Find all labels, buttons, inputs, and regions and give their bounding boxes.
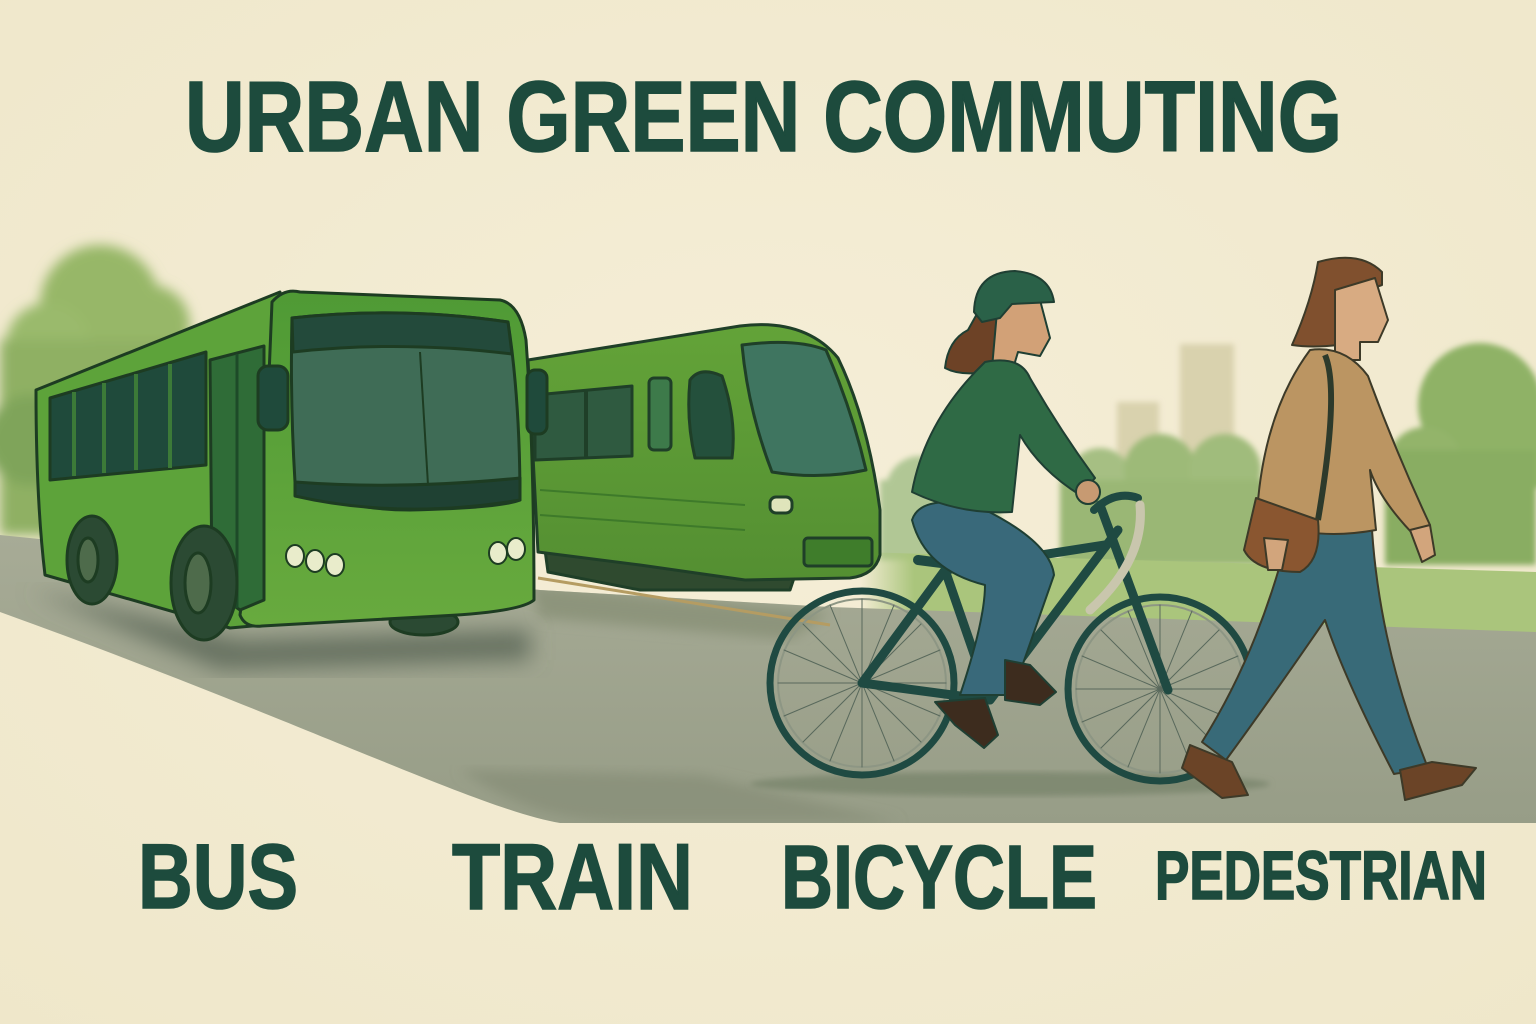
train undercarriage xyxy=(545,550,800,590)
train headlight xyxy=(770,497,792,513)
grass xyxy=(860,552,1536,640)
frame xyxy=(862,505,1168,700)
train panel lines xyxy=(540,490,745,530)
bus door xyxy=(210,346,264,610)
cyclist jacket xyxy=(912,360,1095,512)
bus headlights xyxy=(286,538,525,576)
bag strap xyxy=(1318,355,1331,520)
saddle xyxy=(918,560,965,566)
bus shadow xyxy=(30,590,530,670)
train windscreen xyxy=(742,342,866,476)
train side windows xyxy=(535,386,632,460)
train grille xyxy=(804,538,872,566)
trees right xyxy=(880,343,1536,565)
road shading xyxy=(460,585,900,822)
pedestrian shoes xyxy=(1182,745,1248,798)
pedestrian hair xyxy=(1292,258,1382,346)
bus body front xyxy=(240,291,534,626)
train rail xyxy=(538,578,830,625)
helmet xyxy=(974,271,1054,322)
cyclist hair xyxy=(945,312,1006,373)
label: bus: BUS xyxy=(138,826,298,928)
cyclist xyxy=(912,271,1100,748)
bicycle xyxy=(770,496,1252,781)
pedestrian jacket xyxy=(1256,349,1430,538)
pedestrian xyxy=(1182,258,1476,800)
train xyxy=(528,325,880,590)
bus xyxy=(36,291,547,640)
label: bicycle: BICYCLE xyxy=(781,828,1097,928)
bicycle shadow xyxy=(750,772,1270,796)
bag xyxy=(1244,498,1319,572)
cyclist hand xyxy=(1076,480,1100,504)
bus mirrors xyxy=(258,366,288,430)
cyclist shoes xyxy=(935,698,998,748)
bus body side xyxy=(36,292,300,628)
cyclist face xyxy=(992,300,1050,372)
train door xyxy=(649,378,671,450)
front wheel xyxy=(1068,597,1252,781)
rear wheel xyxy=(770,591,954,775)
train body xyxy=(528,325,880,580)
pedestrian face xyxy=(1335,278,1388,360)
cyclist leg xyxy=(912,502,1054,695)
bus wheels xyxy=(67,516,237,640)
pedestrian hands xyxy=(1264,538,1288,570)
label: train: TRAIN xyxy=(452,824,693,929)
train cab side window xyxy=(689,372,733,458)
skyline xyxy=(1117,344,1234,474)
trees left xyxy=(0,245,200,535)
bus side windows xyxy=(50,352,206,480)
handlebar xyxy=(1094,496,1138,510)
road xyxy=(0,535,1536,823)
bus underside wheel xyxy=(390,609,458,635)
bus windscreen xyxy=(291,313,520,510)
pedestrian trousers xyxy=(1202,528,1428,774)
